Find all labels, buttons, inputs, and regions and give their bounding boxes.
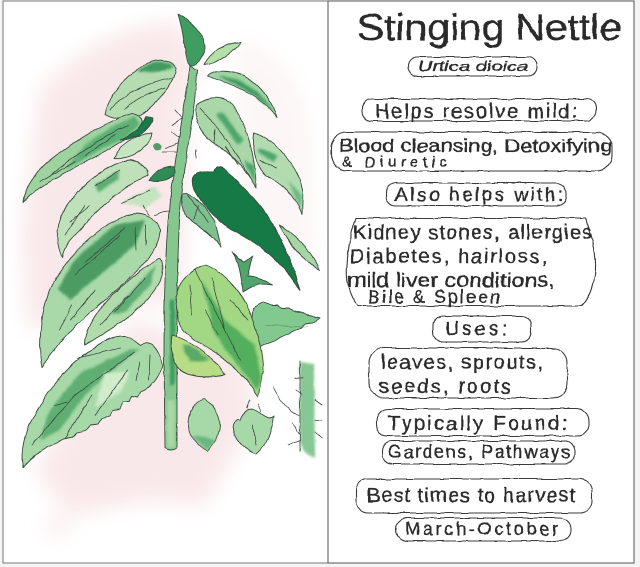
leaf: upper left [105,60,176,119]
plant illustration [22,14,322,467]
scientific name pill [408,57,537,76]
heading: helps resolve mild: Helps resolve mild: [375,101,577,123]
text box: harvest months: March-October [405,519,558,539]
leaf: third left large [40,214,160,368]
text box: blood cleansing: Blood cleansing, Detoxifying [339,136,612,156]
leaf: left long [23,114,142,202]
leaf: upper right narrow [207,71,277,118]
text box: habitats: Gardens, Pathways [388,442,570,462]
leaf: dark heart-shaped [193,167,300,291]
leaf: small dark oval [149,166,178,181]
bud: left [188,399,220,451]
scientific name pill: Urtica dioica [418,58,528,74]
text column [331,7,622,541]
buds along stem [153,110,196,158]
leaf: fourth left [85,258,162,345]
leaf: top small [204,42,241,65]
heading: typically found [376,409,589,436]
heading: best times to harvest [356,479,592,513]
text box: uses [369,348,567,398]
text box: uses: seeds, roots [379,376,511,398]
leaf: right lower slim [279,225,320,271]
text box: uses: leaves, sprouts, [381,352,543,374]
text box: conditions [347,218,596,307]
leaf: dark tip [120,116,153,140]
patches: upper pale sprigs [122,186,170,216]
leaf: right upper [196,98,256,188]
leaf: bottom left large [22,336,163,467]
leaf: right second [254,133,303,214]
leaf: small lower centre [182,194,221,247]
pink watercolour wash [22,22,318,538]
text box: conditions: mild liver conditions, [347,270,555,292]
bud: right [233,400,274,454]
heading: typically found: Typically Found: [388,413,567,435]
heading: uses: Uses: [445,319,507,340]
leaf: centre large [176,265,263,397]
text box: conditions: Diabetes, hairloss, [350,246,547,268]
stem [164,66,197,450]
leaf: small sage behind [114,133,152,158]
panel: information [328,1,634,563]
leaf: sprout centre [232,252,272,292]
text box: blood cleansing: & Diuretic [342,154,448,171]
heading: best times to harvest: Best times to harvest [367,485,575,507]
leaf: right triangular [250,302,320,349]
heading: uses [433,316,531,342]
panel: illustration [3,1,328,563]
leaf: yellow-green lower [171,335,225,377]
stalk with stinging hairs [273,361,322,458]
text box: conditions: Bile & Spleen [368,287,500,307]
title: Stinging Nettle [357,7,622,48]
leaf: top dark [178,14,205,66]
text box: conditions: Kidney stones, allergies [353,222,592,244]
text box: blood cleansing [331,132,612,171]
leaf: second left [57,160,148,258]
heading: also helps with: Also helps with: [395,185,563,206]
